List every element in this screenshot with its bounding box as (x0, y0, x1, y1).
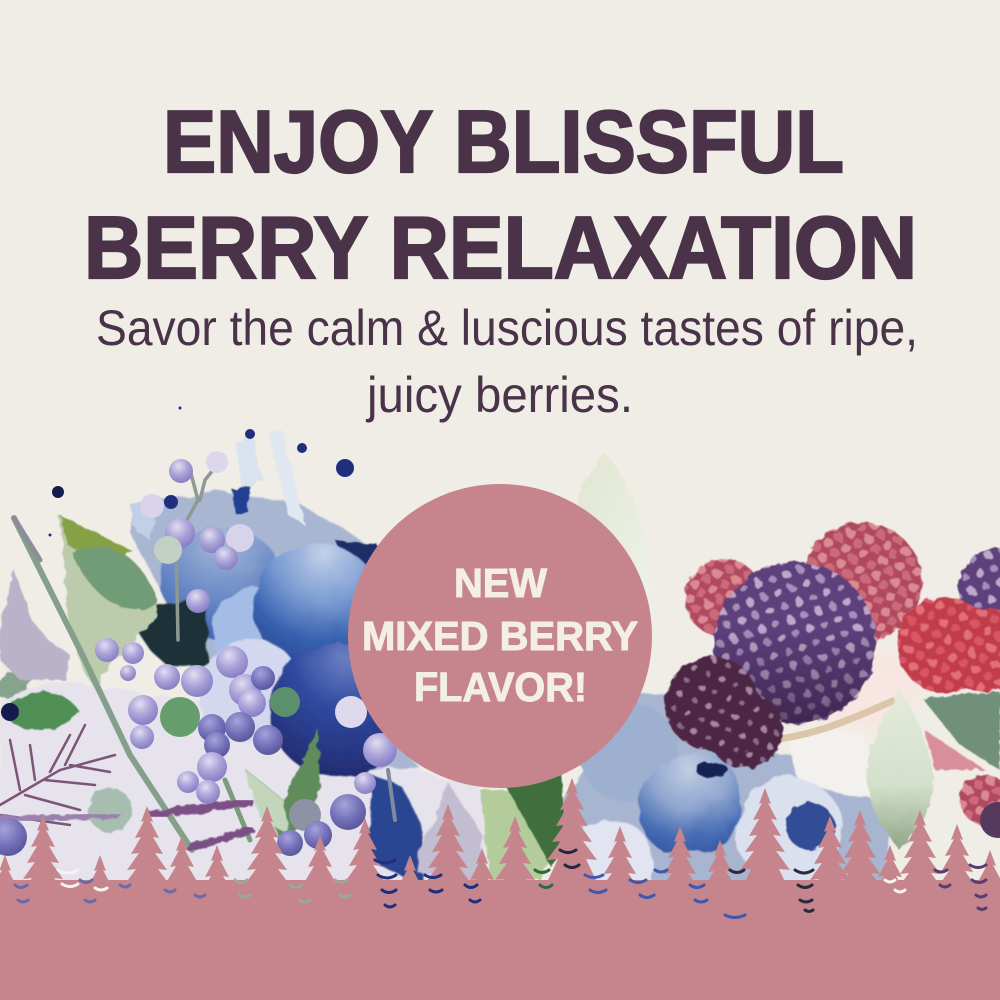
illustration: right pale leaf (867, 690, 933, 850)
pink forest silhouette band (0, 778, 1000, 1000)
illustration: raspberries and blackberries (665, 522, 1000, 838)
illustration: ink splatter (1, 406, 354, 721)
subtitle: juicy berries. (365, 367, 633, 423)
illustration: left wash and blueberries (0, 430, 520, 890)
title (84, 92, 917, 297)
badge: new mixed berry flavor: FLAVOR! (414, 664, 587, 710)
badge: new mixed berry flavor (348, 484, 652, 788)
subtitle: Savor the calm & luscious tastes of ripe, (96, 300, 918, 356)
badge: new mixed berry flavor: NEW (454, 560, 547, 606)
illustration: right pale leaf behind badge (576, 452, 649, 600)
illustration: right blueberries (555, 690, 888, 904)
title: BERRY RELAXATION (84, 198, 917, 297)
badge: new mixed berry flavor: MIXED BERRY (362, 613, 638, 659)
tree gaps showing artwork (15, 850, 986, 918)
illustration: stems and pine branch (0, 465, 395, 850)
subtitle (96, 300, 918, 423)
illustration: left leaves (0, 515, 566, 880)
illustration: small lavender berries (0, 451, 397, 856)
title: ENJOY BLISSFUL (163, 92, 844, 191)
